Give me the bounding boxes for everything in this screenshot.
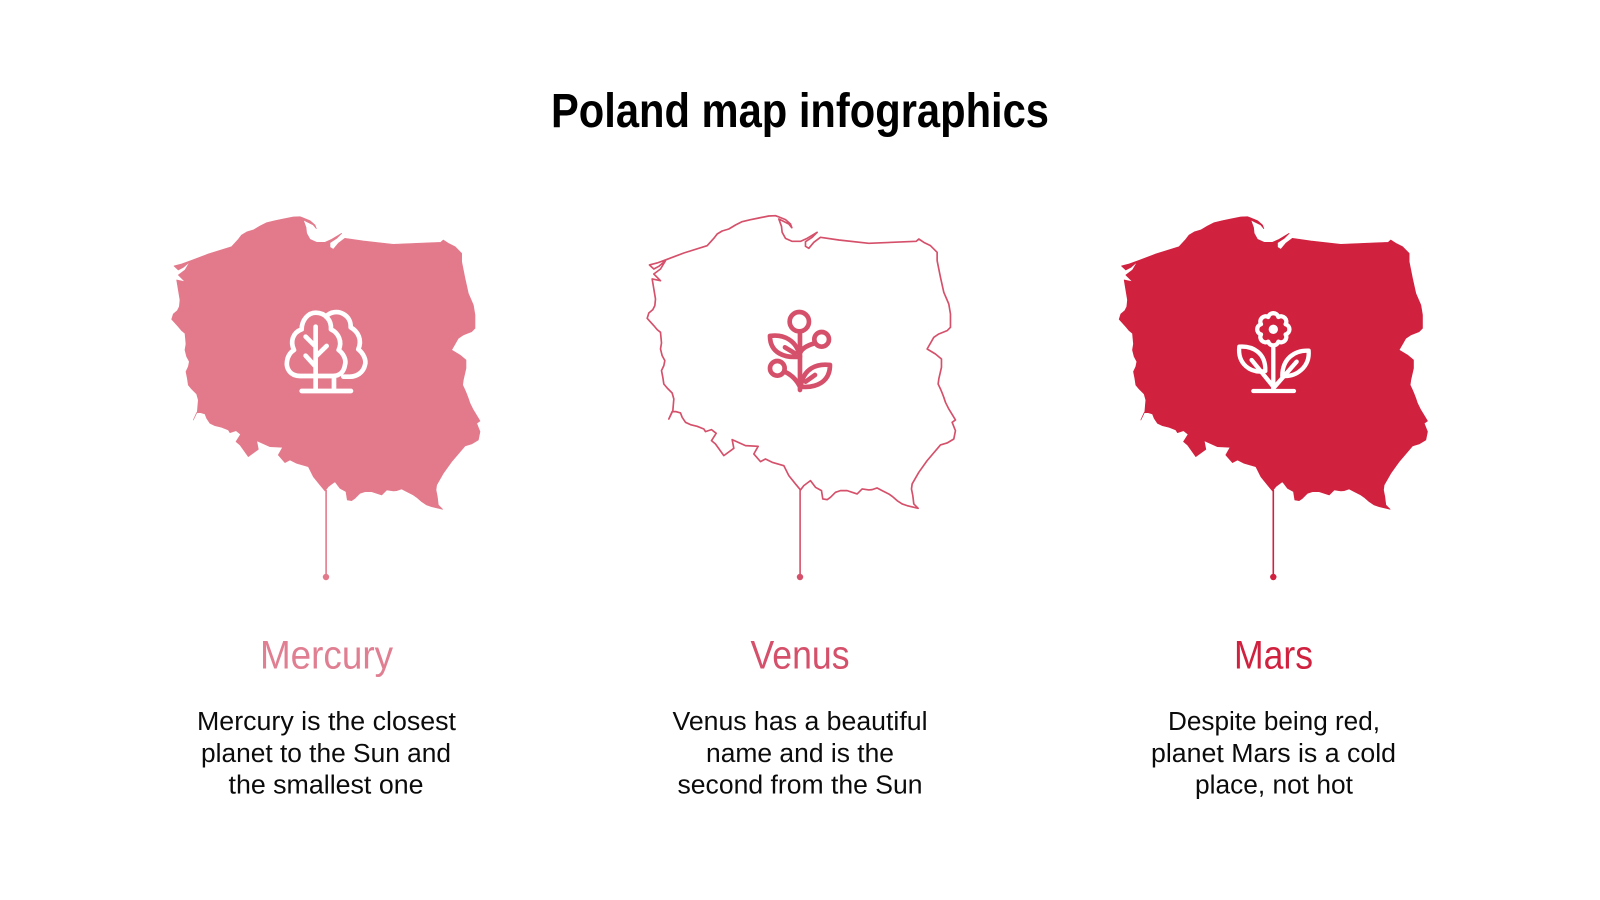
text: Mercury description: the smallest one	[228, 772, 424, 800]
text: Venus description: Venus has a beautiful	[672, 708, 928, 736]
heading: Mercury: Mercury	[260, 634, 393, 678]
text: Venus description	[672, 708, 928, 800]
icon: flower	[1239, 313, 1309, 391]
text: Venus description: second from the Sun	[678, 772, 922, 800]
icon: trees	[287, 312, 365, 391]
connector line with dot	[797, 490, 803, 580]
panel: Mars	[1119, 217, 1427, 800]
text: Venus description: name and is the	[706, 740, 894, 768]
connector line with dot	[323, 490, 329, 580]
text: Mercury description	[197, 708, 456, 800]
heading: Venus: Venus	[750, 634, 850, 678]
panel: Mercury	[172, 217, 480, 800]
map: Poland filled light pink	[172, 217, 480, 509]
text: Mars description: planet Mars is a cold	[1151, 740, 1396, 768]
text: Mars description	[1151, 708, 1396, 800]
heading: Mars: Mars	[1234, 634, 1313, 678]
panel: Venus	[647, 216, 955, 800]
title: Poland map infographics	[551, 85, 1049, 138]
map: Poland outline	[647, 216, 955, 508]
text: Mercury description: Mercury is the closest	[197, 708, 456, 736]
icon: plant with buds	[770, 312, 830, 390]
text: Mars description: place, not hot	[1195, 772, 1353, 800]
map: Poland filled red	[1119, 217, 1427, 509]
connector line with dot	[1270, 490, 1277, 580]
text: Mars description: Despite being red,	[1168, 708, 1380, 736]
text: Mercury description: planet to the Sun and	[201, 740, 451, 768]
